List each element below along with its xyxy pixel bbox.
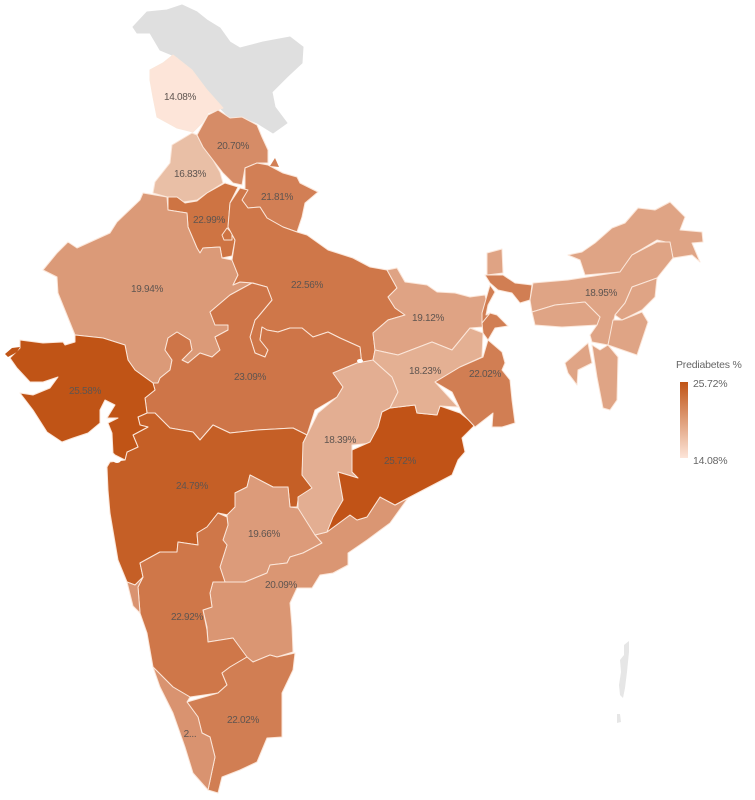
region: 23.09%: 23.09%: [234, 372, 266, 383]
region: 22.02% south: [187, 653, 295, 793]
region: 18.23%: [373, 328, 483, 415]
legend: [676, 359, 742, 467]
region: 22.99%: 22.99%: [193, 215, 225, 226]
region: 18.39%: [298, 360, 398, 535]
white enclave near Daman: [113, 457, 121, 463]
region: Kerala: 2...: [184, 729, 196, 740]
region: 20.70%: 20.70%: [217, 141, 249, 152]
legend minimum: 14.08%: [693, 455, 727, 467]
region: 18.95% north-east: [530, 202, 703, 410]
region: 21.81%: 21.81%: [261, 192, 293, 203]
region: 22.02% east: 22.02%: [469, 369, 501, 380]
region: 22.92%: [138, 513, 247, 697]
region: 19.66%: [220, 475, 322, 582]
region: 18.23%: 18.23%: [409, 366, 441, 377]
region: 19.12%: 19.12%: [412, 313, 444, 324]
region: 22.92%: 22.92%: [171, 612, 203, 623]
region: 19.94%: 19.94%: [131, 284, 163, 295]
region: 21.81%: [242, 158, 318, 232]
region: Andaman and Nicobar Islands (no data): [617, 641, 629, 723]
region: 18.95% north-east: 18.95%: [585, 288, 617, 299]
region: 25.72%: [327, 405, 475, 532]
region: 16.83%: 16.83%: [174, 169, 206, 180]
region: 19.66%: 19.66%: [248, 529, 280, 540]
region: 20.09%: [203, 497, 408, 662]
region: 14.08%: 14.08%: [164, 92, 196, 103]
region: 24.79%: [107, 413, 312, 585]
region: 25.72%: 25.72%: [384, 456, 416, 467]
region: Goa: [127, 577, 143, 613]
region: Jammu and Kashmir (no data): [133, 5, 303, 133]
region: 22.02% south: 22.02%: [227, 715, 259, 726]
region: Kerala: [153, 667, 215, 790]
region: 23.09%: [145, 283, 362, 440]
legend colour bar: [680, 382, 688, 458]
region: 25.58%: [5, 335, 155, 460]
region: 14.08%: [150, 55, 223, 132]
region: 16.83%: [153, 133, 223, 202]
region: 20.70%: [197, 110, 268, 185]
region: 22.99%: [168, 183, 238, 258]
region: 25.58%: 25.58%: [69, 386, 101, 397]
region: 19.94%: [43, 193, 252, 383]
white gap between regions: [357, 359, 363, 363]
region: 22.02% east: [435, 275, 532, 427]
legend title: Prediabetes %: [676, 359, 742, 371]
region: 24.79%: 24.79%: [176, 481, 208, 492]
region: 22.56%: [228, 188, 405, 367]
region: 20.09%: 20.09%: [265, 580, 297, 591]
legend maximum: 25.72%: [693, 378, 727, 390]
region: 18.39%: 18.39%: [324, 435, 356, 446]
region: Sikkim: [487, 249, 503, 275]
region: 19.12%: [373, 268, 487, 355]
region: 22.56%: 22.56%: [291, 280, 323, 291]
